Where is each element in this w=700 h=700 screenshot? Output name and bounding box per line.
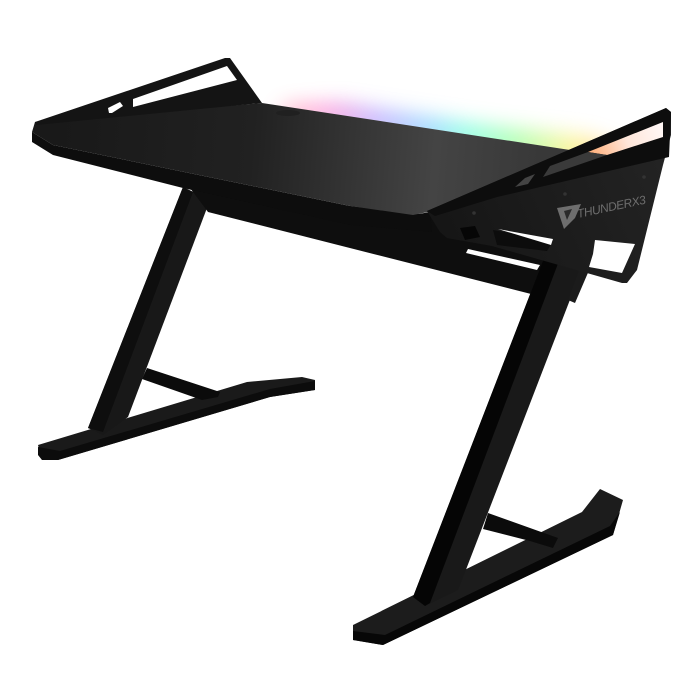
inner grey slot [543, 152, 607, 177]
brand wordmark: THUNDERX3 [576, 193, 647, 221]
right upright [413, 235, 596, 606]
left upright [88, 187, 210, 435]
cable grommet [276, 110, 300, 116]
lower slot [493, 230, 553, 251]
right crossbar [483, 513, 558, 548]
left leg [38, 187, 315, 460]
desktop edge [32, 132, 432, 232]
screws [472, 211, 476, 215]
left crossbar [142, 368, 220, 400]
right foot [353, 489, 623, 645]
square cutout [460, 226, 480, 240]
small diamond hole [515, 174, 535, 187]
brand logo icon [557, 204, 581, 229]
plate window [589, 240, 635, 273]
desktop surface [32, 103, 570, 232]
left side plate [35, 58, 262, 125]
under-desk frame [190, 188, 560, 295]
desktop top [32, 103, 570, 215]
RGB slot [588, 122, 663, 155]
right leg [353, 489, 623, 645]
right side plate [427, 108, 671, 283]
left plate slot [133, 66, 237, 107]
left foot [38, 377, 315, 460]
left plate small hole [108, 102, 123, 113]
RGB glow behind desk [280, 104, 640, 168]
